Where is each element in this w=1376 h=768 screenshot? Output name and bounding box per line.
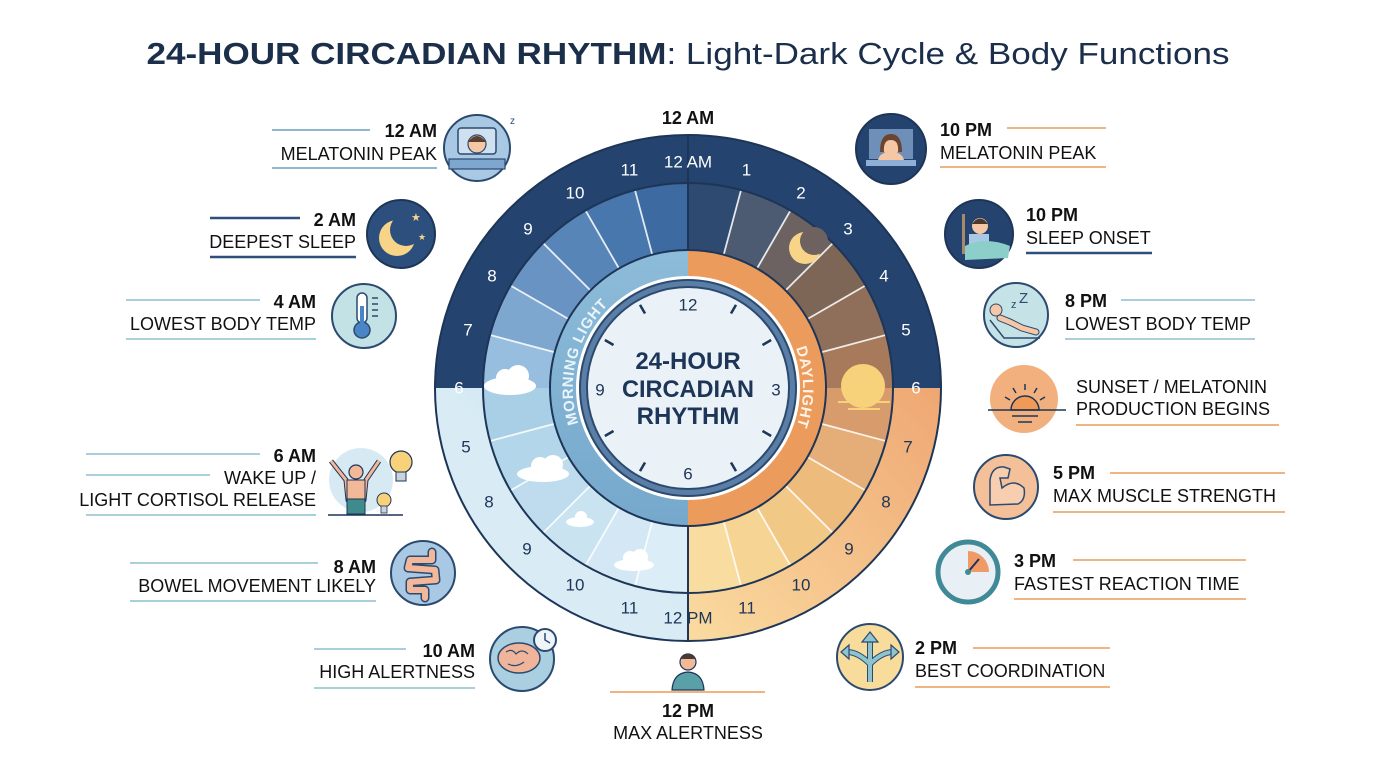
item: 8 PM lowest body temp	[984, 283, 1255, 347]
item: 12 AM melatonin peak (left): 12 AM	[385, 121, 437, 141]
hour labels: 11	[738, 598, 756, 618]
item: 5 PM max muscle strength: MAX MUSCLE STRENGTH	[1053, 486, 1276, 506]
hour labels: 2	[796, 184, 806, 202]
item: 2 AM deepest sleep: DEEPEST SLEEP	[209, 232, 356, 252]
item: 3 PM fastest reaction time: FASTEST REACTION TIME	[1014, 574, 1239, 594]
center title: 24-HOUR	[635, 348, 741, 375]
item: 6 AM wake up	[79, 446, 412, 515]
item: 10 PM melatonin peak (right): 10 PM	[940, 120, 992, 140]
wheel decorations: moon, sun, clouds	[484, 227, 890, 571]
item: 3 PM fastest reaction time	[938, 542, 1246, 602]
center title	[622, 348, 754, 430]
item: 10 PM sleep onset: 10 PM	[1026, 205, 1078, 225]
icon: reclining person zZ	[984, 283, 1048, 347]
item: 2 PM best coordination: 2 PM	[915, 638, 957, 658]
clock face: 3	[771, 380, 781, 400]
item: sunset / melatonin production: PRODUCTION BEGINS	[1076, 399, 1270, 419]
segmented hour wedges	[445, 145, 931, 631]
item: 10 PM sleep onset	[945, 200, 1152, 268]
hour labels: 6	[454, 378, 464, 398]
item: 4 AM lowest body temp: LOWEST BODY TEMP	[130, 314, 316, 334]
hour labels: 12 PM	[663, 608, 713, 628]
hour labels: 3	[843, 220, 853, 238]
clock face: 9	[595, 380, 605, 400]
item: 10 PM sleep onset: SLEEP ONSET	[1026, 228, 1151, 248]
item: 4 AM lowest body temp	[126, 284, 396, 348]
icon: intestines	[391, 541, 455, 605]
light ring: morning light / daylight: MORNING LIGHT	[562, 298, 606, 426]
hour labels: 11	[621, 598, 638, 618]
light ring: morning light / daylight: DAYLIGHT	[796, 346, 814, 429]
hour labels: 4	[879, 266, 889, 286]
icon: person stretching with bulbs	[328, 448, 412, 515]
icon: moon and stars: ★	[411, 212, 421, 224]
item: 10 AM high alertness	[314, 627, 556, 691]
icon: alert person	[672, 654, 704, 690]
item: 12 AM melatonin peak (left)	[272, 115, 515, 181]
hour labels: 5	[461, 438, 471, 456]
item: 12 PM max alertness: MAX ALERTNESS	[613, 723, 763, 743]
hour labels	[454, 152, 921, 628]
light ring: morning light / daylight	[549, 249, 827, 527]
hour labels: 10	[566, 184, 584, 202]
item: 2 AM deepest sleep: 2 AM	[314, 210, 356, 230]
item: 2 PM best coordination	[837, 624, 1110, 690]
outer hour band	[459, 159, 917, 617]
title: 24-HOUR CIRCADIAN RHYTHM : Light-Dark Cycle & Body Functions	[146, 36, 1230, 71]
hour labels: 10	[792, 576, 810, 594]
icon: sleeping person	[444, 115, 515, 181]
icon: sunset	[988, 365, 1066, 433]
item: 6 AM wake up: LIGHT CORTISOL RELEASE	[79, 490, 316, 510]
hour labels: 8	[881, 492, 891, 512]
icon: stopwatch	[938, 542, 998, 602]
hour labels: 9	[523, 220, 533, 238]
item: 12 PM max alertness: 12 PM	[662, 701, 714, 721]
icon: moon and stars: ★	[418, 232, 426, 242]
item: 3 PM fastest reaction time: 3 PM	[1014, 551, 1056, 571]
item: sunset / melatonin production: SUNSET / MELATONIN	[1076, 377, 1267, 397]
item: 12 PM max alertness	[610, 654, 765, 743]
clock face	[580, 280, 796, 496]
icon: reclining person zZ: Z	[1019, 290, 1028, 307]
hour labels: 12 AM	[664, 152, 712, 172]
item: sunset / melatonin production	[988, 365, 1279, 433]
item: 12 AM melatonin peak (left): MELATONIN PEAK	[281, 144, 437, 164]
wheel	[434, 134, 942, 642]
item: 10 PM melatonin peak (right): MELATONIN PEAK	[940, 143, 1096, 163]
item: 8 AM bowel movement	[130, 541, 455, 605]
hour labels: 9	[522, 540, 532, 558]
hour labels: 8	[484, 492, 494, 512]
clock face: 12	[679, 296, 697, 314]
item: 2 AM deepest sleep	[209, 200, 435, 268]
hour labels: 11	[621, 160, 638, 180]
hour labels: 9	[844, 540, 854, 558]
icon: thermometer	[332, 284, 396, 348]
hour labels: 8	[487, 266, 497, 286]
item: 6 AM wake up: 6 AM	[274, 446, 316, 466]
item: 8 PM lowest body temp: LOWEST BODY TEMP	[1065, 314, 1251, 334]
item: 8 AM bowel movement: BOWEL MOVEMENT LIKELY	[138, 576, 376, 596]
hour labels: 5	[901, 320, 911, 340]
item: 2 PM best coordination: BEST COORDINATION	[915, 661, 1105, 681]
top marker: 12 AM: 12 AM	[662, 108, 714, 128]
icon: person in bed	[945, 200, 1013, 268]
hour labels: 7	[903, 438, 913, 456]
item: 10 PM melatonin peak (right)	[856, 114, 1106, 184]
clock face: 6	[683, 464, 693, 484]
item: 5 PM max muscle strength: 5 PM	[1053, 463, 1095, 483]
center title: RHYTHM	[637, 403, 739, 430]
icon: moon and stars	[367, 200, 435, 268]
icon: flexed arm	[974, 455, 1038, 519]
item: 8 PM lowest body temp: 8 PM	[1065, 291, 1107, 311]
icon: reclining person zZ: z	[1011, 299, 1016, 311]
icon: branching arrows	[837, 624, 903, 690]
hour labels: 10	[566, 576, 584, 594]
hour labels: 7	[463, 320, 473, 340]
item: 10 AM high alertness: HIGH ALERTNESS	[319, 662, 475, 682]
icon: sleeping person: z	[510, 116, 515, 127]
icon: sleeping woman	[856, 114, 926, 184]
item: 4 AM lowest body temp: 4 AM	[274, 292, 316, 312]
hour labels: 1	[742, 160, 751, 180]
item: 5 PM max muscle strength	[974, 455, 1285, 519]
center title: CIRCADIAN	[622, 376, 754, 403]
hour labels: 6	[911, 378, 921, 398]
item: 8 AM bowel movement: 8 AM	[334, 557, 376, 577]
item: 10 AM high alertness: 10 AM	[423, 641, 475, 661]
item: 6 AM wake up: WAKE UP /	[224, 468, 316, 488]
icon: brain with clock	[490, 627, 556, 691]
